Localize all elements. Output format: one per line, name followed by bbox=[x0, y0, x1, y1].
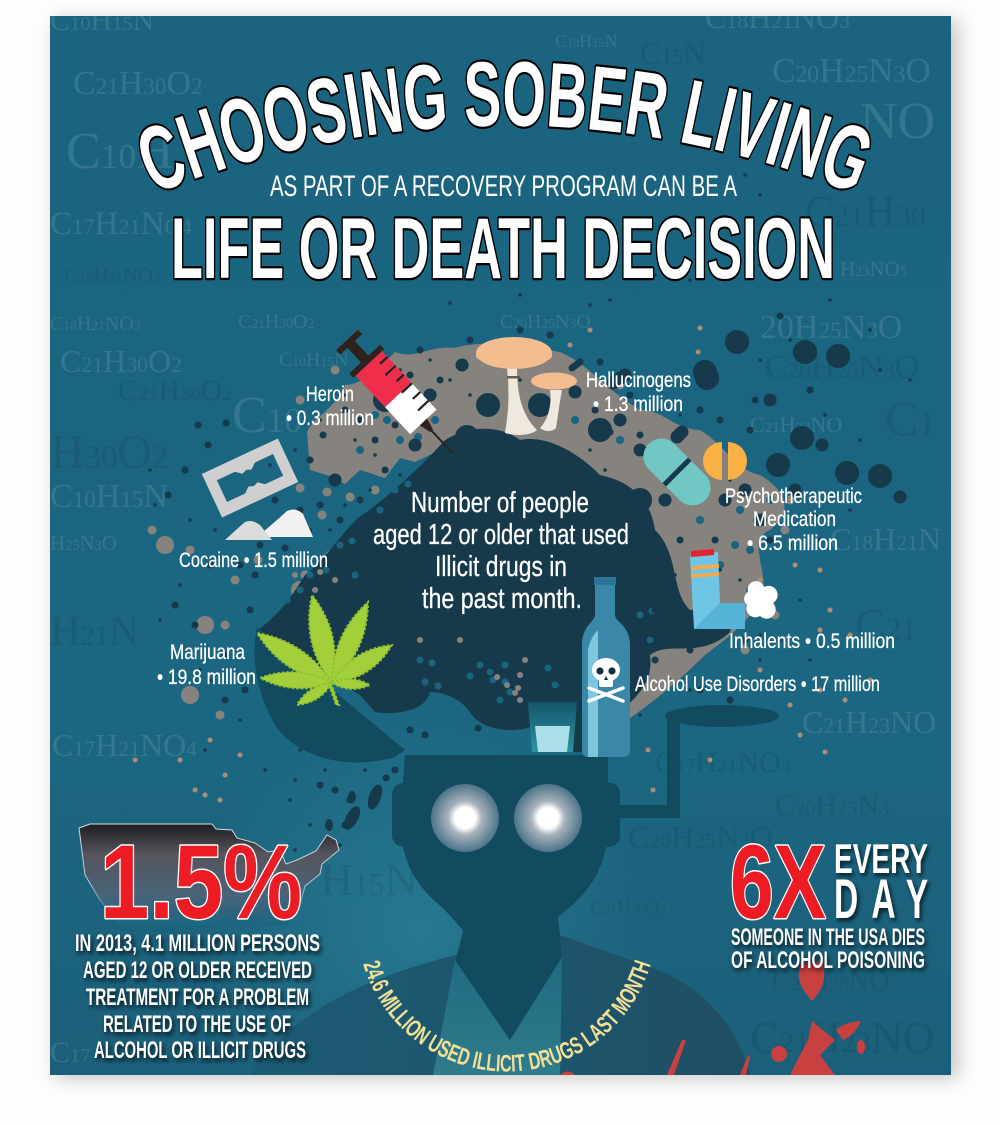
chemical formula watermarks: C18H21NO3 bbox=[50, 313, 141, 335]
shirt collar bbox=[433, 957, 562, 1075]
skull lid half-disc bbox=[254, 627, 405, 762]
treatment paragraph bbox=[75, 930, 320, 1064]
blood splatter bbox=[560, 962, 865, 1075]
chemical formula watermarks: C21H23NO bbox=[772, 966, 889, 997]
stat: 6X every day: DAY bbox=[834, 867, 928, 930]
icon: syringe bbox=[336, 330, 454, 454]
icon: skull and crossbones bbox=[589, 658, 623, 701]
chemical formula watermarks: C20H25N3O bbox=[765, 349, 919, 386]
treatment paragraph: ALCOHOL OR ILLICIT DRUGS bbox=[94, 1037, 306, 1064]
treatment paragraph: RELATED TO THE USE OF bbox=[103, 1011, 291, 1038]
chemical formula watermarks: 20H25N3O bbox=[760, 309, 902, 346]
chemical formula watermarks: C15N bbox=[640, 35, 706, 71]
chemical formula watermarks: C17 bbox=[50, 1036, 90, 1069]
chemical formula watermarks: C18H21NO3 bbox=[705, 0, 850, 35]
ink splatter: dark mass bbox=[258, 429, 731, 752]
central statement: the past month. bbox=[422, 583, 582, 615]
chemical formula watermarks: C21H30O2 bbox=[73, 65, 203, 102]
title: arched heading bbox=[138, 59, 872, 191]
label: marijuana: Marijuana bbox=[170, 641, 245, 664]
chemical formula watermarks: C21H23NO bbox=[750, 1013, 935, 1062]
chemical formula watermarks: C21H23NO bbox=[750, 412, 842, 437]
label: cocaine: Cocaine • 1.5 million bbox=[179, 549, 328, 572]
chemical formula watermarks: C21H30O2 bbox=[238, 311, 314, 333]
label: hallucinogens bbox=[587, 371, 690, 412]
ink splatter: teal holes in gray bbox=[356, 411, 774, 593]
icon: poison bottle bbox=[582, 577, 630, 757]
title: arched heading: CHOOSING SOBER LIVING bbox=[138, 59, 872, 191]
chemical formula watermarks: C10H15N bbox=[50, 4, 154, 37]
chemical formula watermarks: H21N bbox=[50, 609, 139, 655]
label: psychotherapeutic medication: Psychotherapeutic bbox=[725, 485, 862, 508]
label: heroin bbox=[286, 385, 374, 426]
chemical formula watermarks: C21H30O2 bbox=[118, 374, 232, 407]
label: hallucinogens: Hallucinogens bbox=[586, 369, 691, 392]
drug labels bbox=[157, 369, 895, 696]
icon: powder piles bbox=[225, 510, 313, 540]
ink splatter: tan specks bbox=[135, 328, 870, 800]
chemical formula watermarks: C20H25N3 bbox=[775, 789, 889, 822]
chemical formula watermarks: C18H21N bbox=[830, 521, 941, 557]
chemical formula watermarks: H15N bbox=[320, 854, 418, 905]
chemical formula watermarks: C20H25N2O bbox=[628, 819, 773, 855]
chemical formula watermarks: C20H25N3O bbox=[500, 311, 591, 333]
chemical formula watermarks: C21H30O2 bbox=[590, 896, 666, 918]
label: heroin: Heroin bbox=[306, 383, 354, 406]
label: psychotherapeutic medication: • 6.5 million bbox=[747, 532, 838, 555]
label: hallucinogens: • 1.3 million bbox=[593, 393, 683, 416]
icon: capsule pill bbox=[644, 438, 710, 506]
glowing eyes bbox=[431, 784, 582, 852]
icon: inhaler bbox=[690, 549, 778, 629]
chemical formula watermarks: C10H15N bbox=[50, 478, 168, 515]
label: marijuana: • 19.8 million bbox=[157, 666, 256, 689]
chemical formula watermarks: C21 bbox=[855, 599, 917, 650]
ink splatter: gray mass bbox=[152, 344, 790, 725]
stat: 1.5 percent: 1.5% bbox=[100, 824, 302, 941]
icon: mushrooms bbox=[476, 337, 577, 435]
stat: 6X every day: 6X bbox=[730, 824, 826, 941]
icon: razor blade bbox=[202, 438, 298, 518]
label: heroin: • 0.3 million bbox=[286, 407, 374, 430]
chemical formula watermarks: C10H15N bbox=[555, 31, 617, 51]
chemical formula watermarks: H23NO5 bbox=[840, 257, 907, 281]
central statement bbox=[373, 487, 629, 615]
chemical formula watermarks: C17H21NO4 bbox=[52, 727, 197, 763]
chemical formula watermarks: C21H30O2 bbox=[60, 343, 182, 379]
icon: glass bbox=[528, 702, 577, 752]
icon: round tablet bbox=[703, 442, 747, 480]
treatment paragraph: AGED 12 OR OLDER RECEIVED bbox=[83, 957, 312, 984]
ink splatter: mottling inside dark mass bbox=[287, 484, 652, 700]
label: psychotherapeutic medication bbox=[725, 485, 862, 555]
chemical formula watermarks: C10H bbox=[66, 123, 174, 180]
label: psychotherapeutic medication: Medication bbox=[753, 508, 836, 531]
label: alcohol use disorders: Alcohol Use Disorders • 17 million bbox=[635, 673, 880, 696]
stat: 6X every day: EVERY bbox=[834, 835, 928, 882]
chemical formula watermarks: C20H25N3O bbox=[772, 51, 931, 90]
chemical formula watermarks: C21H23NO bbox=[802, 704, 936, 740]
icon: cannabis leaf bbox=[257, 595, 392, 705]
label: inhalants: Inhalents • 0.5 million bbox=[729, 630, 895, 653]
central statement: aged 12 or older that used bbox=[373, 519, 629, 551]
curved caption: 24.6 million: 24.6 MILLION USED ILLICIT DRUGS LAST MONTH bbox=[363, 960, 651, 1072]
central statement: Illicit drugs in bbox=[435, 551, 567, 583]
subtitle: AS PART OF A RECOVERY PROGRAM CAN BE A bbox=[270, 170, 737, 203]
body silhouette bbox=[250, 935, 750, 1075]
treatment paragraph: TREATMENT FOR A PROBLEM bbox=[86, 984, 309, 1011]
chemical formula watermarks: C17H21NO4 bbox=[655, 746, 791, 779]
chemical formula watermarks: NO bbox=[860, 93, 935, 150]
chemical formula watermarks: H30O2 bbox=[50, 426, 168, 479]
label: marijuana bbox=[158, 643, 255, 684]
chemical formula watermarks: C10 bbox=[232, 387, 302, 444]
head silhouette bbox=[392, 755, 620, 1040]
ink drips bbox=[325, 784, 382, 831]
central statement: Number of people bbox=[411, 487, 589, 519]
chemical formula watermarks: H25N3O bbox=[50, 531, 117, 555]
chemical formula watermarks: C18H21NO3 bbox=[65, 263, 160, 287]
open skull lid and crank arm bbox=[620, 705, 779, 818]
chemical formula watermarks: C10H15N bbox=[279, 349, 348, 371]
stat: 6X every day bbox=[730, 824, 928, 974]
chemical formula watermarks: C21H30 bbox=[805, 187, 926, 236]
chemical formula watermarks: C1 bbox=[885, 390, 935, 446]
chemical formula watermarks: C17H21NO4 bbox=[50, 206, 192, 242]
treatment paragraph: IN 2013, 4.1 MILLION PERSONS bbox=[75, 930, 320, 957]
US map bbox=[79, 824, 339, 925]
ink splatter: dark spots bbox=[150, 175, 910, 850]
